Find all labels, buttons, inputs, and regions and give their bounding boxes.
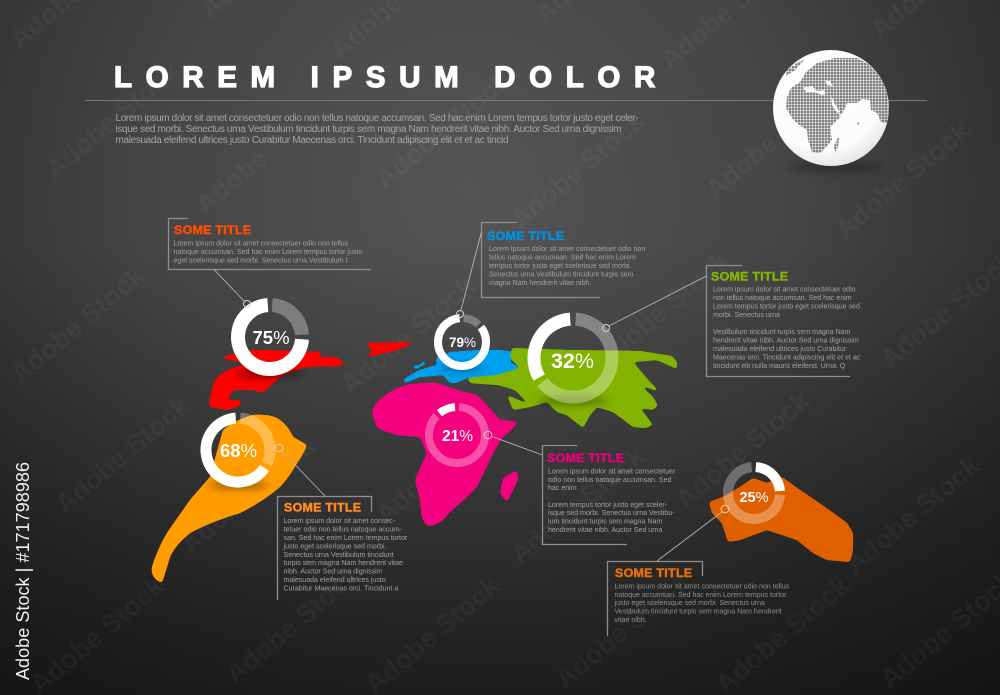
callout: blue: Senectus urna Vestibulum tincidunt turpis sem (489, 272, 634, 278)
callout: pink: Lorem ipsum dolor sit amet consectetuer (548, 468, 676, 476)
header rule (85, 100, 927, 102)
callout: pink: SOME TITLE (547, 451, 624, 465)
callout: dark orange (608, 505, 790, 636)
callout: pink: Lorem tempus tortor justo eget sceler- (548, 502, 668, 509)
intro text: isque sed morbi. Senectus urna Vestibulum tincidunt turpis sem magna Nam hendrerit vitae nibh. Auctor Sed urna dignissim (116, 124, 622, 135)
callout: green (602, 266, 861, 376)
watermark: Adobe Stock (50, 390, 196, 520)
callout: orange: Senectus urna Vestibulum tincidunt (284, 552, 394, 559)
callout: pink: hac enim (548, 485, 577, 492)
callout: dark orange: natoque accumsan. Sed hac enim Lorem tempus tortor (614, 592, 787, 599)
donut: 25%: 25% (739, 490, 769, 506)
callout: red (168, 218, 371, 308)
callout: blue (456, 222, 645, 318)
callout: dark orange: Lorem ipsum dolor sit amet consectetuer odio non tellus (614, 584, 790, 590)
donut: 75%: 75% (252, 327, 290, 348)
callout: pink: isque sed morbi. Senectus urna Vestibu- (548, 510, 675, 517)
watermark: Adobe Stock (550, 565, 696, 695)
watermark: Adobe Stock (840, 450, 986, 580)
watermark: Adobe Stock (505, 440, 651, 570)
watermark: Adobe Stock (40, 55, 186, 185)
callout: green: tincidunt elit nulla mauris eleifend. Urna. Q (713, 363, 846, 370)
callout: orange: turpis sem magna Nam hendrerit vitae (284, 560, 403, 567)
callout: orange (275, 444, 408, 600)
region: dark orange (709, 477, 853, 562)
callout: orange: nibh. Auctor Sed urna dignissim (284, 568, 383, 576)
callout: red: natoque accumsan. Sed hac enim Lorem tempus tortor justo (174, 249, 362, 256)
watermark: Adobe Stock (370, 400, 516, 530)
donut: 32% (520, 305, 626, 411)
watermark: Adobe Stock (370, 65, 516, 195)
callout: orange: malesuada eleifend ultrices justo (284, 577, 386, 584)
stock id label: Adobe Stock | #171798986 (13, 462, 33, 680)
callout: green: Lorem ipsum dolor sit amet consectetuer odio (713, 286, 856, 294)
region: blue (403, 350, 520, 383)
callout: green: Maecenas orci. Tincidunt adipiscing elit et et ac (713, 354, 861, 362)
watermark: Adobe Stock (220, 560, 366, 690)
icon: globe (773, 50, 889, 172)
watermark: Adobe Stock (590, 245, 736, 375)
watermark: Adobe Stock (175, 430, 321, 560)
callout: red: eget scelerisque sed morbi. Senectus urna Vestibulum t (174, 258, 347, 264)
callout: blue: Lorem ipsum dolor sit amet consectetuer odio non (489, 246, 645, 253)
region: green (467, 348, 677, 428)
donut: 79%: 79% (449, 335, 476, 350)
callout: pink (484, 431, 676, 544)
watermark: Adobe Stock (335, 270, 481, 400)
callout: orange: justo eget scelerisque sed morbi. (282, 544, 387, 550)
region: orange south (152, 415, 307, 583)
title: LOREM IPSUM DOLOR (114, 61, 669, 94)
callout: green: hendrerit vitae nibh. Auctor Sed urna dignissim (713, 338, 859, 344)
callout: blue: tempus tortor justo eget scelerisue sed morbi. (489, 263, 632, 270)
callout: orange: tetuer odio non tellus natoque accum- (284, 526, 402, 534)
callout: dark orange: vitae nibh. (614, 617, 647, 624)
donut: 32%: 32% (551, 349, 594, 373)
callout: green: Lorem tempus tortor justo eget scelerisque sed (713, 304, 860, 310)
callout: dark orange: SOME TITLE (615, 566, 692, 580)
callout: orange: Lorem ipsum dolor sit amet consec- (284, 518, 396, 525)
callout: blue: magna Nam hendrerit vitae nibh. (489, 280, 591, 287)
callout: green: morbi. Senectus urna (713, 312, 780, 319)
watermark: Adobe (700, 128, 783, 205)
watermark: Adobe Stock (505, 105, 651, 235)
watermark: Adobe Stock (830, 115, 976, 245)
watermark: Adobe Stock (670, 385, 816, 515)
region: red north (209, 342, 416, 410)
intro text (116, 113, 639, 146)
callout: orange: Curabitur Maecenas orci. Tincidunt a (284, 586, 398, 592)
watermark: Adobe (190, 143, 273, 220)
donut: 79% (428, 308, 496, 376)
callout: pink: lum tincidunt turpis sem magna Nam (548, 518, 662, 526)
region: pink africa (372, 383, 518, 526)
donut: 68%: 68% (220, 440, 257, 461)
watermark: Adobe Stock (5, 260, 151, 390)
callout: orange: SOME TITLE (284, 500, 361, 514)
callout: green: malesuada eleifend ultrices justo Curabitur (713, 346, 847, 353)
callout: pink: odio non tellus natoque accumsan. Sed (548, 477, 671, 484)
donut: 75% (236, 303, 304, 378)
donut: 21% (418, 396, 496, 474)
callout: blue: tellus natoque accumsan. Sed hac enim Lorem (489, 254, 636, 262)
callout: green: non tellus natoque accumsan. Sed hac enim (713, 295, 852, 302)
callout: dark orange: Vestibulum tincidunt turpis sem magna Nam hendrerit (614, 608, 782, 616)
donut: 25% (726, 465, 782, 521)
intro text: malesuada eleifend ultrices justo Curabitur Maecenas orci. Tincidunt adipiscing elit et et ac tincid (116, 135, 509, 146)
callout: dark orange: justo eget scelerisque sed morbi. Senectus urna (614, 600, 765, 607)
map: world regions (152, 342, 853, 583)
callout: orange: san. Sed hac enim Lorem tempus tortor (284, 535, 408, 542)
donut: 68% (194, 406, 282, 494)
callout: green: Vestibulum tincidunt turpis sem magna Nam (713, 329, 851, 336)
callout: blue: SOME TITLE (487, 229, 564, 243)
callout: red: SOME TITLE (174, 223, 251, 237)
intro text: Lorem ipsum dolor sit amet consectetuer odio non tellus natoque accumsan. Sed hac enim Lorem tempus tortor justo eget celer- (116, 113, 639, 124)
callout: red: Lorem ipsum dolor sit amet consectetuer odio non tellus (174, 240, 349, 248)
callout: green: SOME TITLE (711, 270, 788, 284)
callout: pink: hendrerit vitae nibh. Auctor Sed urna (548, 527, 662, 534)
donut: 21%: 21% (442, 428, 473, 445)
